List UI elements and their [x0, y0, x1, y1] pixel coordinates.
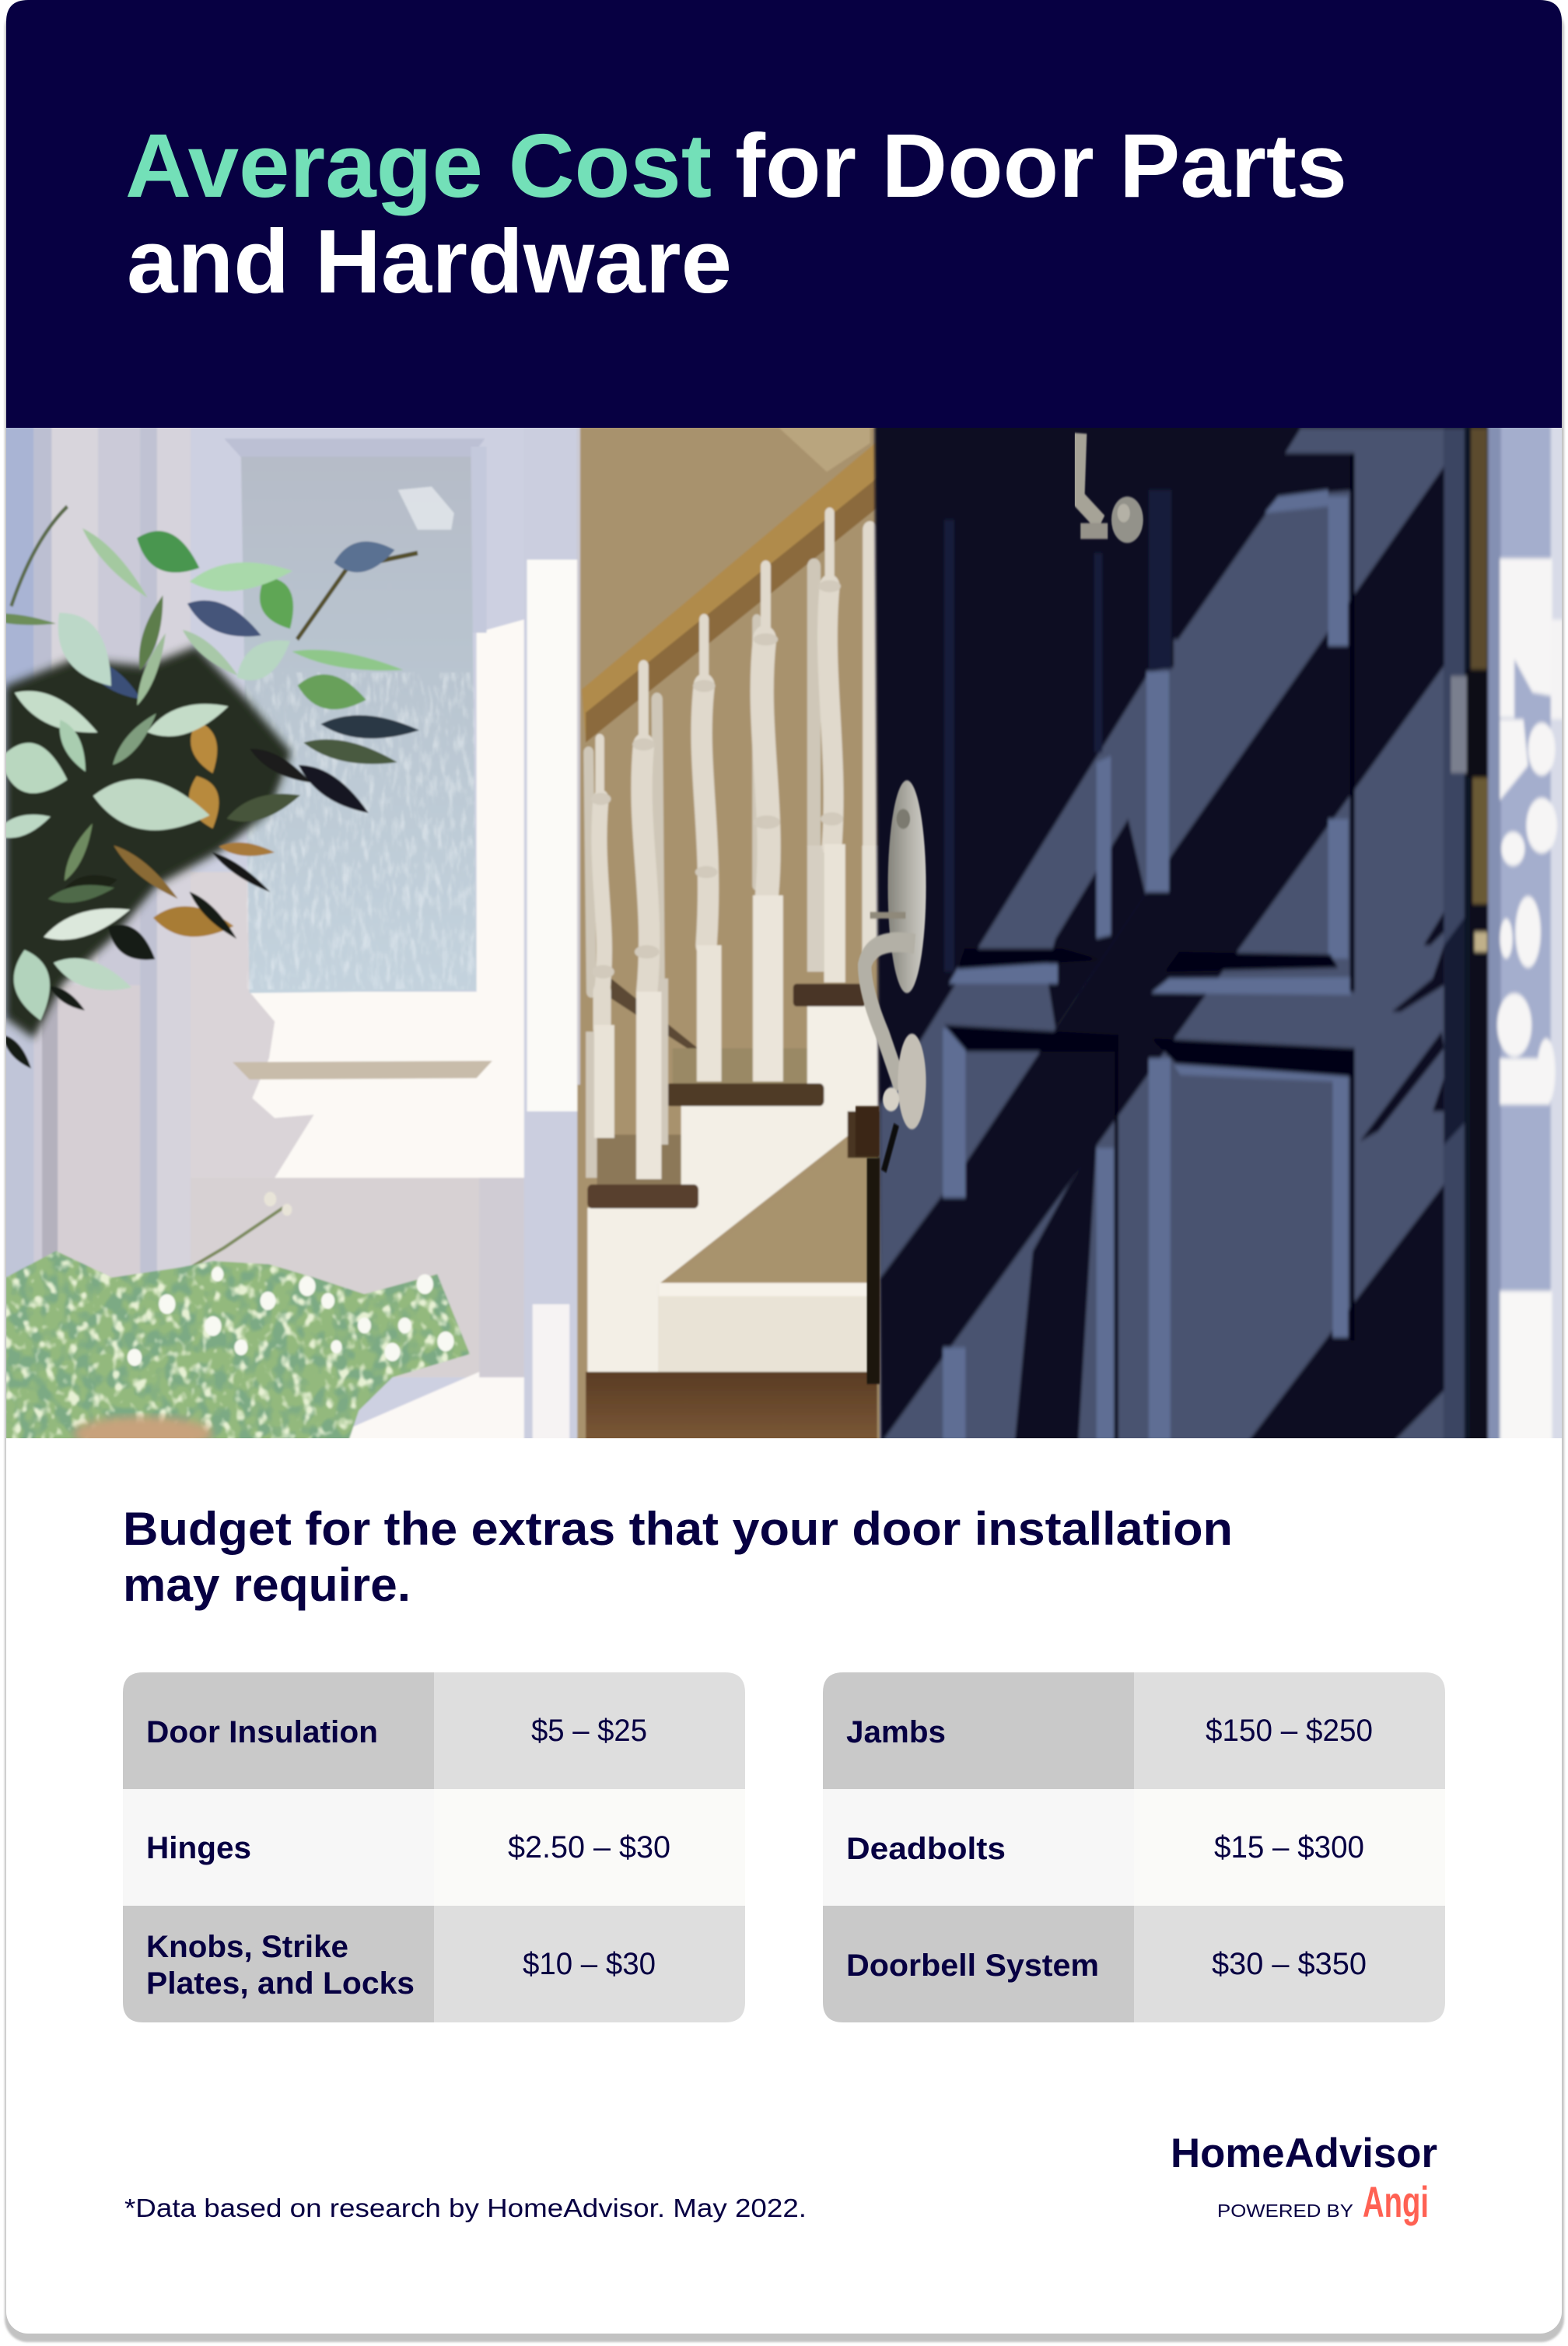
row: hinges: $2.50 – $30 [508, 1830, 670, 1865]
panel: header [6, 0, 1562, 428]
baluster row [586, 513, 879, 1179]
row: jambs: $150 – $250 [1206, 1714, 1373, 1748]
table: left costs [123, 1672, 745, 2022]
row: doorbell system: $30 – $350 [1212, 1947, 1367, 1981]
icon: magnolia plant [0, 506, 420, 1073]
row: doorbell system: Doorbell System [846, 1949, 1099, 1983]
row: knobs, strike plates, and locks [146, 1930, 656, 2001]
panel moldings [943, 453, 1354, 1441]
row: door insulation: Door Insulation [146, 1715, 378, 1749]
logo: HomeAdvisor powered by Angi: Angi [1363, 2177, 1429, 2226]
row: knobs, strike plates, and locks: Plates, and Locks [146, 1966, 415, 2001]
icon: flowering bush [0, 1192, 477, 1451]
logo: HomeAdvisor powered by Angi [1171, 2131, 1437, 2226]
row: hinges [146, 1830, 670, 1865]
footnote: *Data based on research by HomeAdvisor. May 2022. [124, 2194, 807, 2222]
door side stile [1444, 428, 1469, 1445]
glass frost texture [247, 673, 474, 989]
row: deadbolts [846, 1830, 1364, 1866]
subheading [123, 1503, 1233, 1611]
title: for Door Parts [735, 115, 1347, 216]
logo: HomeAdvisor powered by Angi: POWERED BY [1217, 2201, 1353, 2221]
row: deadbolts: Deadbolts [846, 1832, 1006, 1866]
photo: open front door and staircase [0, 420, 1568, 1451]
logo: HomeAdvisor powered by Angi: HomeAdvisor [1171, 2131, 1437, 2176]
row: door insulation [146, 1714, 647, 1749]
row: knobs, strike plates, and locks: $10 – $30 [523, 1947, 656, 1981]
hinge [1451, 669, 1488, 778]
door frame and sunlit jamb [1469, 420, 1568, 1444]
row: hinges: Hinges [146, 1831, 251, 1865]
row: deadbolts: $15 – $300 [1214, 1830, 1364, 1865]
row: jambs [846, 1714, 1373, 1749]
row: jambs: Jambs [846, 1715, 946, 1749]
table: right costs [823, 1672, 1445, 2022]
subheading: Budget for the extras that your door installation [123, 1503, 1233, 1555]
title: and Hardware [127, 211, 732, 312]
icon: upper door closer hardware [1078, 433, 1143, 543]
photo right: dark blue open door [856, 420, 1568, 1445]
row: doorbell system [846, 1947, 1367, 1983]
door shadows [1014, 453, 1444, 1444]
title: Average Cost [125, 115, 712, 216]
icon: lower handle and lock plate [856, 780, 926, 1384]
sunlit diagonal bands on door [880, 428, 1444, 1444]
photo left: white door, wall and stairs [0, 420, 880, 1451]
title [125, 115, 1347, 312]
row: door insulation: $5 – $25 [531, 1714, 647, 1748]
row: knobs, strike plates, and locks: Knobs, Strike [146, 1930, 348, 1964]
subheading: may require. [123, 1559, 411, 1611]
